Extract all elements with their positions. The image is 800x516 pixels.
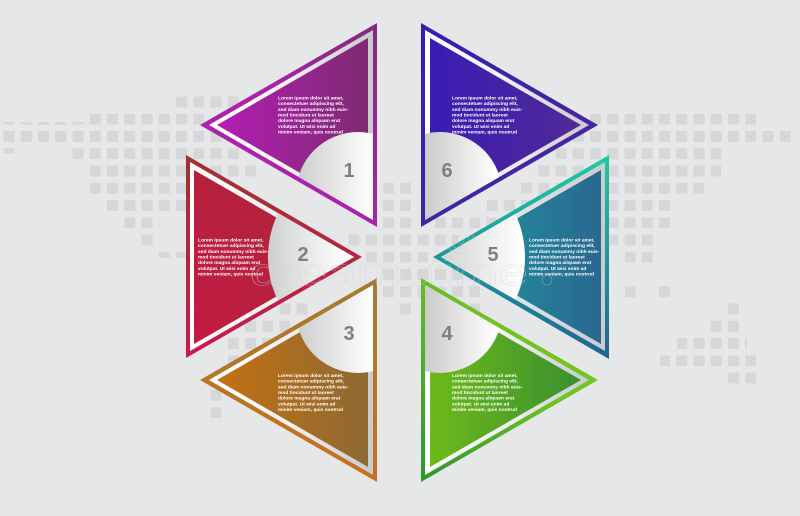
text block 1: mod tincidunt ut laoreet: [278, 112, 334, 118]
watermark: dreamstime: [250, 252, 528, 294]
panel 1: purple triangle: [200, 23, 377, 227]
text block 2: mod tincidunt ut laoreet: [198, 254, 254, 260]
text block 3: volutpat. Ut wisi enim ad: [278, 401, 335, 407]
text block 4: sed diam nonummy nibh euis-: [452, 384, 523, 390]
text block 4: minim veniam, quis nostrud: [452, 407, 517, 413]
text block 5: volutpat. Ut wisi enim ad: [529, 266, 586, 272]
text block 6: dolore magna aliquam erat: [452, 118, 515, 124]
dotted world map: [4, 96, 797, 418]
text block 1: consectetuer adipiscing elit,: [278, 101, 344, 107]
number 6: 6: [441, 160, 453, 182]
text block 3: mod tincidunt ut laoreet: [278, 390, 334, 396]
text block 2: volutpat. Ut wisi enim ad: [198, 266, 255, 272]
text block 5: sed diam nonummy nibh euis-: [529, 249, 600, 255]
text block 4: dolore magna aliquam erat: [452, 396, 515, 402]
number 5: 5: [487, 244, 499, 266]
text block 2: dolore magna aliquam erat: [198, 260, 261, 266]
panel 3: amber triangle: [200, 278, 377, 482]
panel 4: green triangle: [421, 278, 598, 482]
text block 6: sed diam nonummy nibh euis-: [452, 107, 523, 113]
number 1: 1: [343, 160, 355, 182]
text block 4: mod tincidunt ut laoreet: [452, 390, 508, 396]
text block 3: minim veniam, quis nostrud: [278, 407, 343, 413]
panel 5: teal triangle: [433, 155, 609, 359]
panel 6: indigo triangle: [421, 23, 598, 227]
text block 1: sed diam nonummy nibh euis-: [278, 107, 349, 113]
text block 5: dolore magna aliquam erat: [529, 260, 592, 266]
text block 3: consectetuer adipiscing elit,: [278, 379, 344, 385]
text block 6: volutpat. Ut wisi enim ad: [452, 124, 509, 130]
text block 6: minim veniam, quis nostrud: [452, 130, 517, 136]
text block 2: sed diam nonummy nibh euis-: [198, 249, 269, 255]
watermark: [250, 226, 552, 294]
number 4: 4: [441, 323, 453, 345]
text block 6: consectetuer adipiscing elit,: [452, 101, 518, 107]
panel 2: crimson triangle: [186, 155, 362, 358]
text block 4: volutpat. Ut wisi enim ad: [452, 401, 509, 407]
text block 5: consectetuer adipiscing elit,: [529, 243, 595, 249]
text block 5: minim veniam, quis nostrud: [529, 272, 594, 278]
number 2: 2: [297, 244, 309, 266]
text block 1: dolore magna aliquam erat: [278, 118, 341, 124]
text block 3: sed diam nonummy nibh euis-: [278, 384, 349, 390]
text block 1: minim veniam, quis nostrud: [278, 130, 343, 136]
text block 6: Lorem ipsum dolor sit amet,: [452, 96, 518, 102]
text block 5: Lorem ipsum dolor sit amet,: [529, 238, 595, 244]
text block 6: mod tincidunt ut laoreet: [452, 112, 508, 118]
text block 4: Lorem ipsum dolor sit amet,: [452, 373, 518, 379]
text block 5: mod tincidunt ut laoreet: [529, 254, 585, 260]
text block 1: volutpat. Ut wisi enim ad: [278, 124, 335, 130]
text block 3: Lorem ipsum dolor sit amet,: [278, 373, 344, 379]
number 3: 3: [343, 323, 355, 345]
text block 2: consectetuer adipiscing elit,: [198, 243, 264, 249]
text block 1: Lorem ipsum dolor sit amet,: [278, 96, 344, 102]
text block 3: dolore magna aliquam erat: [278, 396, 341, 402]
text block 4: consectetuer adipiscing elit,: [452, 379, 518, 385]
text block 2: Lorem ipsum dolor sit amet,: [198, 238, 264, 244]
text block 2: minim veniam, quis nostrud: [198, 272, 263, 278]
